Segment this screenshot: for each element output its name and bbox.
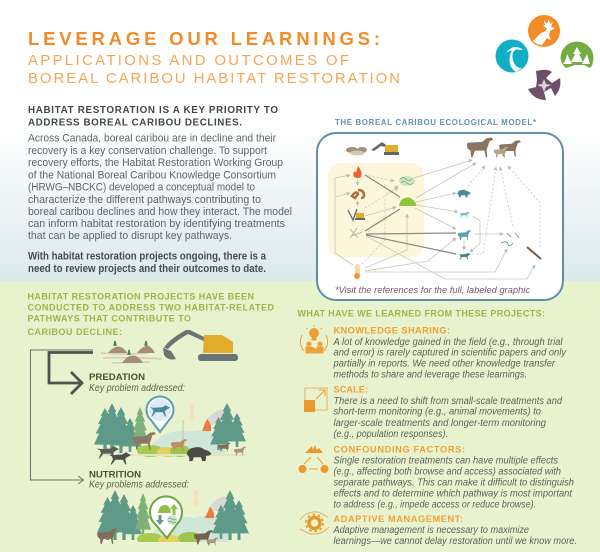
panel: scale: larger-scale treatments and longer-term monitoring <box>334 418 546 429</box>
intro body text <box>28 133 292 242</box>
intro body text: recovery efforts, the Habitat Restoration Working Group <box>28 157 283 169</box>
intro body text: of the National Boreal Caribou Knowledge Consortium <box>28 170 276 182</box>
yellow habitat zone <box>328 163 424 257</box>
icon: vegetation location pin <box>150 496 182 538</box>
intro body text: characterize the different pathways contributing to <box>28 194 261 206</box>
intro bold statement <box>28 251 266 275</box>
intro body text: can inform habitat restoration by identifying treatments <box>28 218 285 230</box>
icon: purple wind circle <box>528 70 560 100</box>
panel: adaptive management: Adaptive management is necessary to maximize <box>333 525 529 536</box>
nutrition label: NUTRITION <box>89 470 141 481</box>
panel: scale: short-term monitoring (e.g., animal movements) to <box>334 406 541 418</box>
illustration: mounds and excavator <box>101 330 238 363</box>
intro heading: HABITAT RESTORATION IS A KEY PRIORITY TO <box>28 105 278 116</box>
left heading: habitat-related pathways <box>28 292 274 337</box>
intro heading <box>28 105 278 129</box>
logo: consortium icons <box>496 15 594 100</box>
left heading: habitat-related pathways: CONDUCTED TO ADDRESS TWO HABITAT-RELATED <box>28 303 274 313</box>
panel: confounding factors: (e.g., affecting both browse and access) associated with <box>334 466 561 477</box>
title: LEVERAGE OUR LEARNINGS: <box>28 28 380 49</box>
panel: knowledge sharing <box>300 325 567 381</box>
icon: small excavator <box>348 209 365 220</box>
panel: adaptive management: ADAPTIVE MANAGEMENT: <box>334 514 463 524</box>
arrow: to predation <box>49 352 93 394</box>
panel: boreal caribou ecological model <box>317 133 563 300</box>
icon: adaptive management <box>300 512 329 534</box>
icon: eroded road <box>352 190 364 198</box>
panel: confounding factors: separate pathways. This can make it difficult to distinguish <box>334 478 574 489</box>
intro heading: ADDRESS BOREAL CARIBOU DECLINES. <box>28 118 242 129</box>
nutrition label <box>89 470 189 491</box>
panel: scale: (e.g., population responses). <box>334 429 448 440</box>
arrow: to nutrition <box>30 350 93 484</box>
icon: small prey <box>459 212 470 218</box>
title <box>28 28 400 87</box>
icon: scale <box>304 388 327 412</box>
icon: bear <box>457 190 471 197</box>
icon: cut lines <box>350 228 362 238</box>
intro bold statement: With habitat restoration projects ongoing, there is a <box>28 251 266 263</box>
panel: scale: SCALE: <box>334 385 368 395</box>
panel: adaptive management: learnings—we cannot delay restoration until we know more. <box>334 536 577 547</box>
icon: linear features <box>501 233 519 246</box>
panel: confounding factors: CONFOUNDING FACTORS: <box>334 444 465 454</box>
panel: confounding factors: Single restoration treatments can have multiple effects <box>334 455 558 466</box>
panel: confounding factors: effects and to determine which pathway is most important <box>334 489 573 500</box>
icon: mounds and excavator <box>346 142 399 156</box>
predation label <box>89 372 185 394</box>
intro body text: (HRWG–NBCKC) developed a conceptual model to <box>28 182 255 194</box>
model note: *Visit the references for the full, labeled graphic <box>335 285 531 295</box>
left heading: habitat-related pathways: HABITAT RESTORATION PROJECTS HAVE BEEN <box>28 292 254 302</box>
panel: knowledge sharing: A lot of knowledge gained in the field (e.g., through trial <box>333 337 563 348</box>
panel: scale: There is a need to shift from small-scale treatments and <box>334 396 562 407</box>
model arrows <box>335 160 540 279</box>
panel: scale <box>304 385 562 440</box>
right heading: lessons learned: WHAT HAVE WE LEARNED FROM THESE PROJECTS: <box>298 309 545 319</box>
intro body text: Across Canada, boreal caribou are in decline and their <box>28 133 276 145</box>
title: BOREAL CARIBOU HABITAT RESTORATION <box>28 70 400 87</box>
panel: knowledge sharing: KNOWLEDGE SHARING: <box>334 326 450 336</box>
icon: wolf <box>458 253 471 260</box>
intro bold statement: need to review projects and their outcomes to date. <box>28 263 266 275</box>
icon: knowledge sharing <box>300 325 328 353</box>
panel: confounding factors: to address (e.g., impede access or reduce browse). <box>334 500 536 511</box>
left heading: habitat-related pathways: CARIBOU DECLINE: <box>28 327 122 337</box>
icon: green vegetation <box>399 197 416 206</box>
icon: fire <box>353 166 362 178</box>
panel: adaptive management <box>300 512 577 547</box>
left heading: habitat-related pathways: PATHWAYS THAT CONTRIBUTE TO <box>28 314 191 324</box>
model heading: THE BOREAL CARIBOU ECOLOGICAL MODEL* <box>335 118 537 127</box>
predation label: PREDATION <box>89 372 145 383</box>
icon: confounding factors <box>298 445 328 473</box>
icon: orange caribou circle <box>528 15 560 47</box>
intro body text: boreal caribou declines and how they interact. The model <box>28 206 292 218</box>
icon: moose <box>458 230 471 240</box>
illustration: nutrition scene <box>92 490 250 552</box>
panel: knowledge sharing: and error) is rarely captured in scientific papers and only <box>334 348 567 359</box>
icon: wolf location pin <box>146 396 174 432</box>
icon: green forest circle <box>560 42 594 68</box>
panel: confounding factors <box>298 444 574 511</box>
icon: teal river circle <box>496 40 528 72</box>
illustration: predation scene <box>92 396 248 464</box>
nutrition label: Key problems addressed: <box>89 480 189 491</box>
panel: knowledge sharing: methods to share and leverage these learnings. <box>334 370 527 381</box>
icon: thermometer <box>354 264 360 279</box>
intro body text: that can be applied to disrupt key pathways. <box>28 230 232 242</box>
panel: knowledge sharing: partially in reports. We need other knowledge transfer <box>333 359 556 370</box>
predation label: Key problem addressed: <box>89 383 185 394</box>
heavy pathways <box>365 175 456 254</box>
icon: caribou group <box>467 137 521 158</box>
title: APPLICATIONS AND OUTCOMES OF <box>28 52 349 69</box>
intro body text: recovery is a key conservation challenge. To support <box>28 145 267 157</box>
icon: rifle <box>527 247 541 259</box>
icon: browse shrub <box>399 176 415 186</box>
